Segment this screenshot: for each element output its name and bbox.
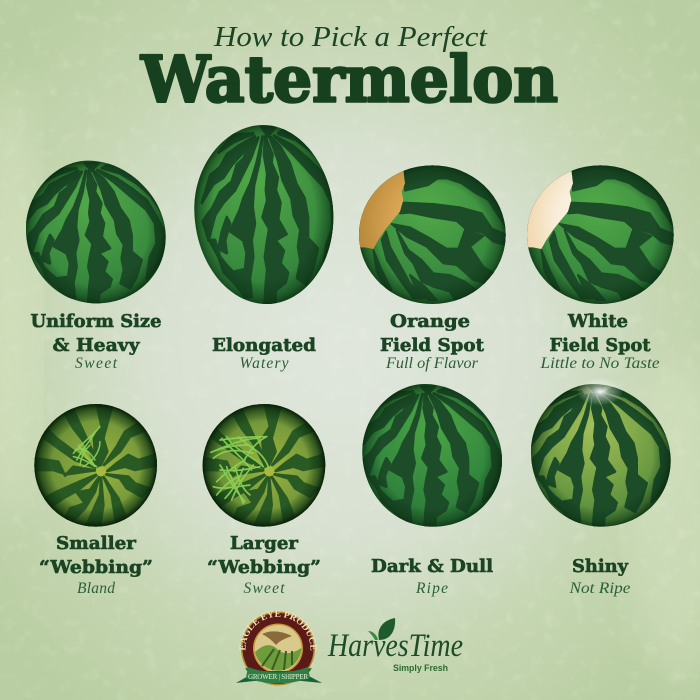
label: orange: Full of Flavor: [385, 355, 479, 372]
logo ribbon: GROWER | SHIPPER: [248, 673, 308, 681]
label: dark and dull: [371, 556, 493, 597]
melon: smaller webbing: [33, 402, 158, 527]
panel: uniform size and heavy: [25, 161, 167, 372]
label: orange: Field Spot: [380, 335, 485, 356]
label: larger webbing: Sweet: [244, 580, 285, 597]
melon: elongated: [194, 125, 343, 304]
logo: HarvesTime: [327, 618, 463, 674]
label: white: Field Spot: [550, 335, 651, 356]
title: [140, 22, 558, 118]
panel: white field spot: [527, 165, 675, 372]
label: uniform: Uniform Size: [30, 311, 162, 332]
label: orange: [380, 311, 485, 372]
panel: smaller webbing: [33, 402, 158, 597]
label: elongated: [212, 335, 316, 372]
melon: shiny: [530, 378, 672, 527]
logo: Eagle Eye Produce: EAGLE EYE PRODUCE: [239, 610, 317, 651]
label: uniform: & Heavy: [52, 335, 140, 356]
panel: shiny: [530, 378, 672, 597]
label: larger webbing: “Webbing”: [207, 557, 321, 578]
panel: elongated: [194, 125, 343, 372]
panel: larger webbing: [201, 402, 327, 597]
label: uniform: [30, 311, 162, 372]
label: white: White: [567, 311, 628, 332]
label: uniform: Sweet: [75, 355, 118, 372]
melon: larger webbing: [201, 402, 327, 527]
panel: dark and dull: [361, 384, 503, 597]
melon: uniform: [25, 161, 167, 304]
label: white: [539, 311, 660, 372]
subtitle line: How to Pick a Perfect: [213, 22, 488, 53]
field spot: orange: [359, 171, 405, 249]
label: shiny: Shiny: [572, 556, 629, 577]
label: shiny: Not Ripe: [568, 580, 631, 597]
label: dark and dull: Ripe: [415, 580, 448, 597]
logo: HarvesTime: HarvesTime: [327, 628, 463, 664]
label: smaller webbing: Bland: [77, 580, 115, 597]
logo: Eagle Eye Produce: [236, 610, 322, 686]
highlight: [577, 378, 623, 406]
label: smaller webbing: Smaller: [56, 533, 137, 554]
melon: orange spot: [359, 165, 507, 307]
label: orange: Orange: [390, 311, 470, 332]
label: shiny: [568, 556, 631, 597]
label: larger webbing: Larger: [230, 533, 299, 554]
label: elongated: Watery: [240, 355, 289, 372]
webbing: small cluster: [73, 427, 100, 467]
label: elongated: Elongated: [212, 335, 316, 356]
webbing: large cluster: [211, 437, 268, 503]
panel: orange field spot: [359, 165, 507, 372]
melon: dark and dull: [361, 384, 503, 527]
main title: Watermelon: [140, 42, 558, 118]
label: smaller webbing: [39, 533, 153, 597]
logo: HarvesTime: Simply Fresh: [393, 663, 448, 674]
icon: leaf: [378, 618, 395, 640]
field spot: white: [527, 171, 573, 249]
label: smaller webbing: “Webbing”: [39, 557, 153, 578]
melon: white spot: [527, 165, 675, 307]
label: dark and dull: Dark & Dull: [371, 556, 493, 577]
label: larger webbing: [207, 533, 321, 597]
label: white: Little to No Taste: [539, 355, 660, 372]
